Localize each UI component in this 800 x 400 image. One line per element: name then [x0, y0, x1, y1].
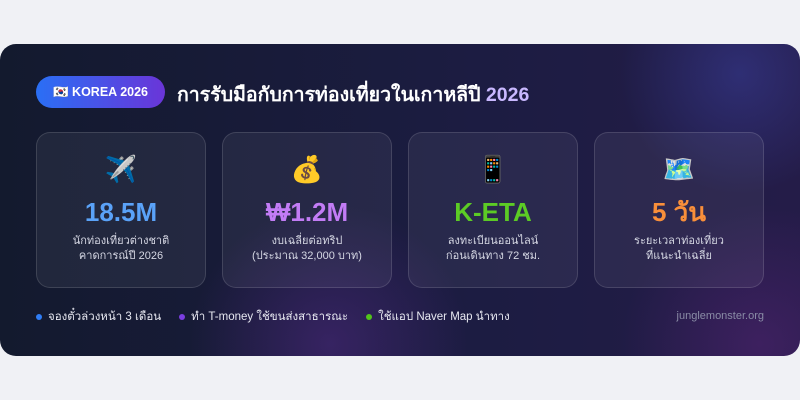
icon: money bag: 💰: [291, 154, 323, 184]
value: ₩1.2M: [266, 197, 348, 227]
label: (ประมาณ 32,000 บาท): [252, 250, 362, 262]
label: ระยะเวลาท่องเที่ยว: [634, 235, 724, 247]
icon: map: 🗺️: [663, 154, 695, 184]
footer tips: ทำ T-money ใช้ขนส่งสาธารณะ: [191, 311, 348, 323]
label: ลงทะเบียนออนไลน์: [448, 235, 538, 247]
label: [634, 232, 724, 262]
card: duration: [594, 132, 764, 288]
card: tourists: [36, 132, 206, 288]
value: 5 วัน: [652, 197, 706, 227]
label: [73, 232, 169, 262]
label: [252, 232, 362, 262]
icon: phone: 📱: [477, 154, 509, 184]
label: ที่แนะนำเฉลี่ย: [646, 250, 712, 262]
card: K-ETA: [408, 132, 578, 288]
value: 18.5M: [85, 197, 157, 227]
card: budget: [222, 132, 392, 288]
source: junglemonster.org: [677, 310, 764, 322]
label: คาดการณ์ปี 2026: [79, 250, 163, 262]
label: ก่อนเดินทาง 72 ชม.: [446, 250, 540, 262]
title: การรับมือกับการท่องเที่ยวในเกาหลีปี 2026: [177, 84, 529, 106]
label: งบเฉลี่ยต่อทริป: [272, 235, 342, 247]
label: นักท่องเที่ยวต่างชาติ: [73, 235, 169, 247]
badge: [36, 76, 165, 108]
footer tips: ใช้แอป Naver Map นำทาง: [378, 311, 510, 323]
main panel: [0, 44, 800, 356]
footer tips: จองตั๋วล่วงหน้า 3 เดือน: [48, 311, 161, 323]
value: K-ETA: [454, 197, 532, 227]
footer tips: [36, 308, 510, 323]
icon: plane: ✈️: [105, 154, 137, 184]
badge: 🇰🇷 KOREA 2026: [53, 85, 148, 99]
label: [446, 234, 540, 262]
